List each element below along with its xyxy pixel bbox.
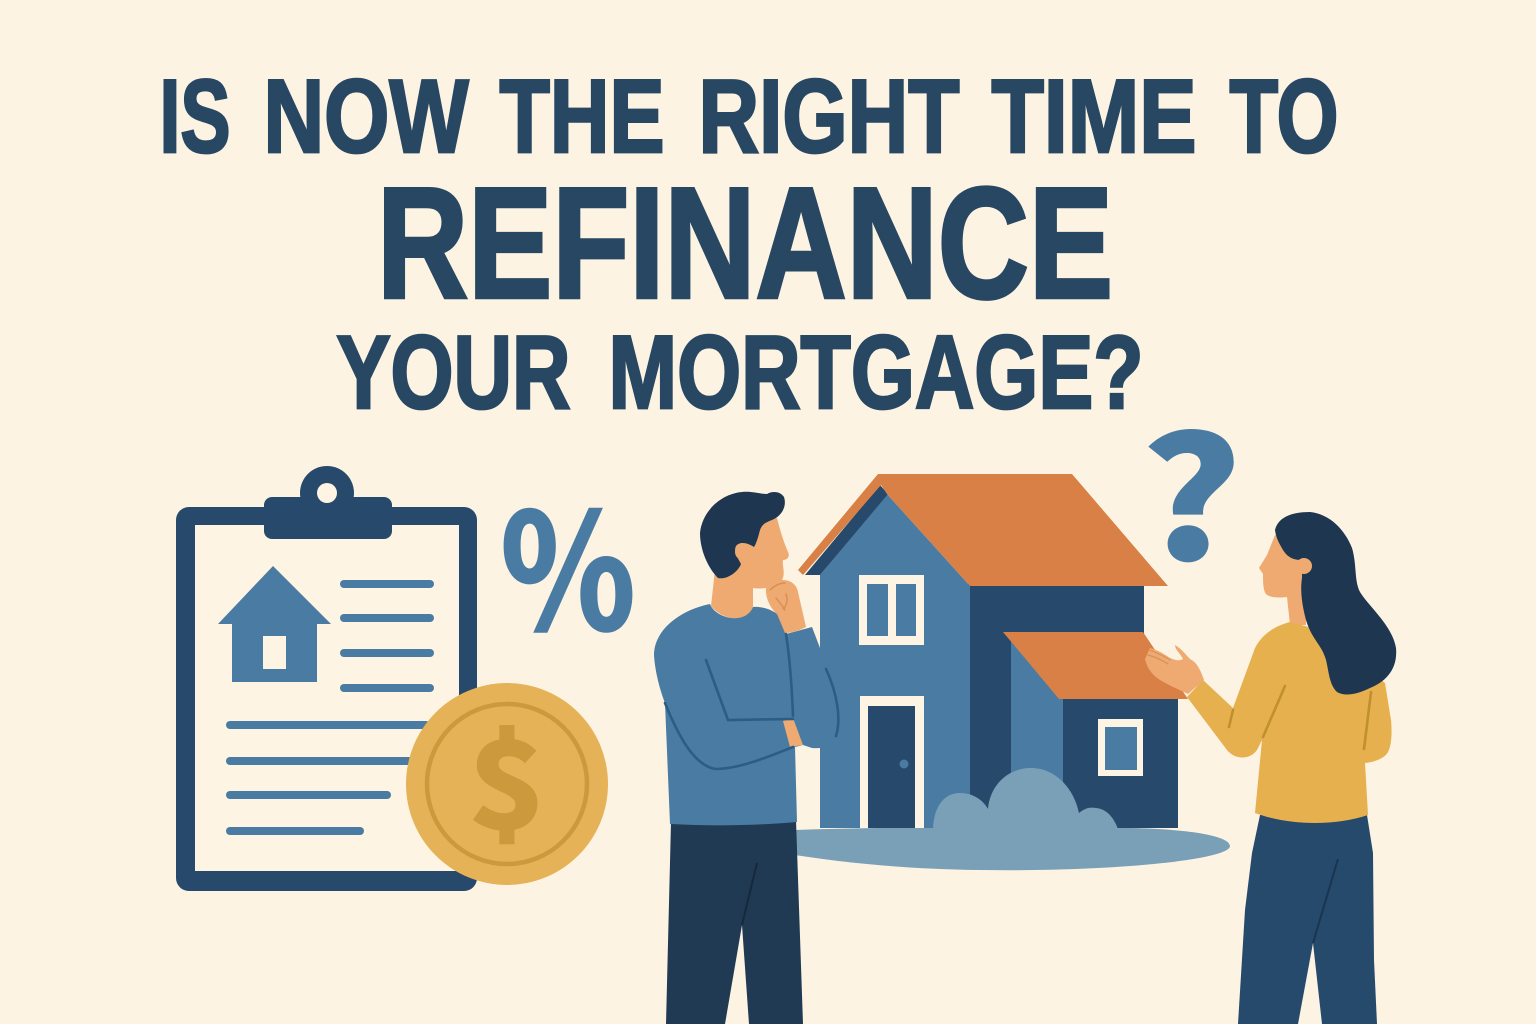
house front gable wall <box>820 494 970 828</box>
icon: clipboard document <box>176 466 477 891</box>
clipboard board <box>176 507 477 891</box>
house gable shadow <box>805 485 888 575</box>
man neck and face <box>711 518 789 618</box>
character: woman <box>1145 512 1396 1024</box>
man finger lines <box>770 583 787 610</box>
icon: small house on document <box>218 566 331 682</box>
title line 3: YOUR <box>336 314 570 430</box>
house annex light wall <box>1011 640 1063 828</box>
title line 1: RIGHT <box>698 58 960 174</box>
man raised hand <box>766 580 806 633</box>
man ear <box>735 544 751 560</box>
house front door <box>860 696 924 828</box>
illustration: house <box>798 474 1188 829</box>
icon: question mark: ? <box>1139 366 1243 609</box>
icon: dollar coin <box>406 683 608 885</box>
house upper window <box>859 575 924 645</box>
title line 1: TO <box>1230 58 1338 174</box>
house main roof <box>798 474 1168 586</box>
woman trousers <box>1238 815 1377 1024</box>
woman hair <box>1275 512 1396 695</box>
woman face and neck <box>1259 535 1306 625</box>
house annex dark wall <box>1063 698 1178 828</box>
document text lines <box>226 580 434 835</box>
icon: dollar coin: $ <box>468 688 546 865</box>
woman sweater fold lines <box>1229 686 1371 749</box>
title line 2: refinance: REFINANCE <box>377 156 1113 332</box>
title line 1: TIME <box>992 58 1196 174</box>
character: man <box>654 492 840 1024</box>
title line 1: IS <box>160 58 230 174</box>
bush <box>933 768 1118 829</box>
icon: percent sign: % <box>500 443 636 678</box>
man trousers <box>666 820 803 1024</box>
title line 1: THE <box>500 58 664 174</box>
woman finger lines <box>1148 650 1170 664</box>
clipboard clip <box>264 466 392 539</box>
woman sweater <box>1187 622 1392 823</box>
man hair <box>700 492 785 578</box>
house dark side wall <box>968 584 1144 828</box>
title line 3: MORTGAGE? <box>608 314 1144 430</box>
title <box>160 58 1338 430</box>
house lower roof <box>1003 632 1188 699</box>
house annex window <box>1098 719 1143 776</box>
man sweater fold lines <box>665 634 838 769</box>
clipboard paper <box>195 525 459 871</box>
title line 1: NOW <box>264 58 469 174</box>
woman ear <box>1296 558 1312 574</box>
man resting hand <box>783 718 803 747</box>
ground ellipse <box>795 827 1230 870</box>
man sweater <box>654 604 840 825</box>
woman hand <box>1145 645 1204 694</box>
